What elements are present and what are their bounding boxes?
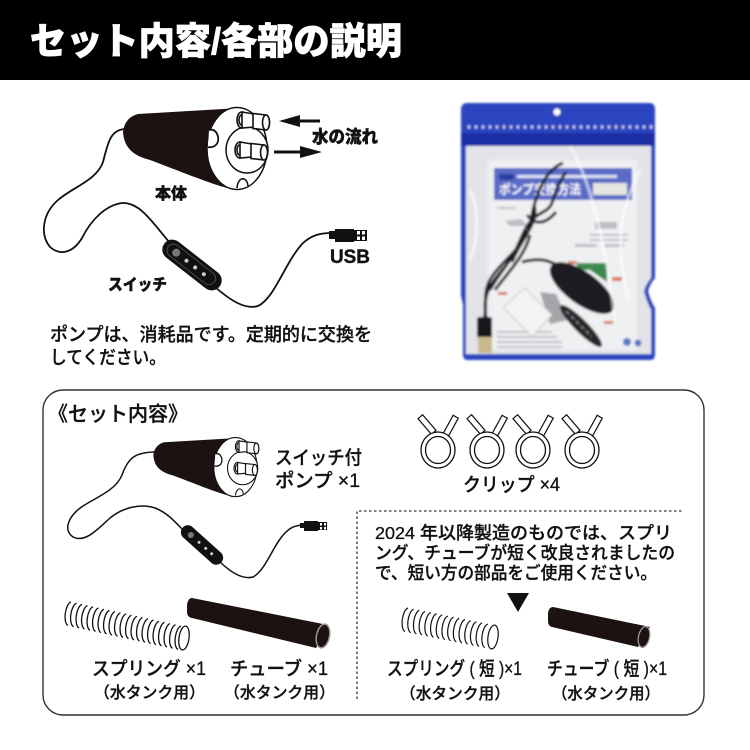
folded cable: [484, 163, 566, 320]
label: short spring: スプリング ( 短 )×1: [387, 658, 522, 680]
label: main unit: 本体: [155, 184, 187, 203]
label: long spring: [92, 658, 206, 702]
USB metal in bag: [478, 337, 492, 353]
switch: [178, 522, 226, 568]
switch in bag: [556, 301, 606, 351]
seals: [623, 338, 642, 346]
label: short tube: [547, 657, 667, 703]
leaflet: [488, 160, 637, 350]
pump in bag: [542, 253, 622, 323]
cable to USB: [218, 525, 302, 578]
label: USB: USB: [330, 247, 370, 268]
label: long spring: （水タンク用）: [94, 684, 205, 702]
USB plug: [329, 229, 367, 242]
label: switch: スイッチ: [108, 276, 167, 294]
item: clips: [418, 415, 602, 468]
note about pump replacement: [50, 324, 372, 368]
label: long spring: スプリング ×1: [92, 658, 206, 680]
cable: [68, 452, 186, 539]
note about pump replacement: ポンプは、消耗品です。定期的に交換を: [50, 324, 372, 345]
pump body: [153, 438, 259, 497]
grey items behind: [540, 292, 568, 324]
note: 2024 revision: [375, 523, 675, 583]
pump body: [123, 108, 270, 190]
item: long tube: [187, 598, 332, 649]
switch: [158, 236, 226, 294]
arrow: water in: [279, 115, 320, 127]
arrow: water out: [274, 146, 322, 158]
label: short spring: （水タンク用）: [400, 685, 510, 703]
note about pump replacement: してください。: [50, 347, 166, 368]
item: short spring: [402, 608, 500, 650]
note: 2024 revision: 2024 年以降製造のものでは、スプリ: [375, 523, 672, 543]
label: pump with switch: スイッチ付: [275, 447, 362, 469]
leaflet faint content: [497, 207, 628, 348]
bag: [461, 103, 655, 360]
clear window: [466, 146, 651, 354]
pump cable to USB: [215, 233, 332, 307]
label: long tube: チューブ ×1: [230, 657, 328, 680]
pump cable: [44, 129, 170, 252]
plastic glare: [470, 146, 640, 320]
item: pump with switch: [68, 438, 327, 578]
panel: set contents: [43, 390, 704, 715]
hang hole: [554, 108, 560, 116]
header bar: [0, 0, 750, 80]
item: long spring: [65, 602, 191, 651]
dotted note frame: [357, 511, 684, 699]
label: long tube: [224, 657, 335, 702]
green leaflet picture: [577, 263, 607, 282]
zipper dots: [468, 126, 652, 128]
item: short tube: [548, 607, 652, 648]
label: short tube: チューブ ( 短 )×1: [547, 657, 667, 680]
USB plug: [300, 521, 327, 531]
label: pump with switch: [275, 447, 362, 492]
clips pack in bag: [503, 288, 552, 337]
leaflet header: [494, 168, 632, 200]
panel heading: 《セット内容》: [48, 403, 188, 426]
label: water flow: 水の流れ: [312, 127, 378, 147]
zipper dark band: [461, 133, 655, 146]
note: 2024 revision: ング、チューブが短く改良されましたの: [375, 543, 675, 563]
arrow: down triangle: [507, 593, 529, 612]
label: short tube: （水タンク用）: [552, 685, 660, 703]
label: short spring: [387, 658, 522, 703]
leaflet header: ポンプ交換方法: [499, 182, 581, 197]
label: pump with switch: ポンプ ×1: [275, 470, 360, 492]
pump diagram: [44, 108, 378, 307]
label: long tube: （水タンク用）: [224, 684, 335, 702]
note: 2024 revision: で、短い方の部品をご使用ください。: [375, 563, 657, 583]
title: セット内容/各部の説明: [30, 21, 402, 62]
USB plug in bag: [477, 317, 492, 338]
red tabs: [498, 261, 622, 324]
label: clips: クリップ ×4: [463, 474, 560, 496]
product photo: [461, 103, 655, 360]
